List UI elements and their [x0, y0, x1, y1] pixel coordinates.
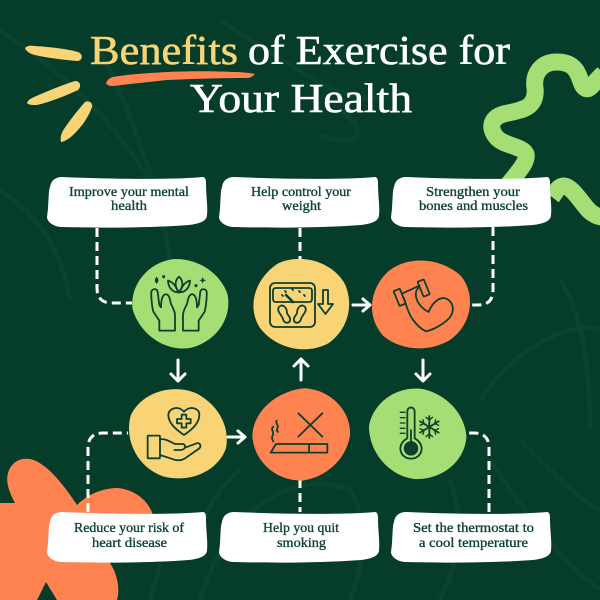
connector: bones and muscles: [470, 227, 493, 305]
box: improve mental health: health: [111, 198, 147, 213]
arrow: bones to thermostat: [416, 360, 430, 381]
arrow: heart disease to quit smoking: [228, 431, 245, 443]
icon: thermometer and snowflake: [400, 407, 439, 459]
circle: heart disease: [109, 373, 245, 495]
box: thermostat: a cool temperature: [419, 535, 528, 550]
decoration: green squiggle: [492, 62, 600, 217]
title: of Exercise for: [248, 27, 510, 73]
icon: flexed arm with dumbbell: [394, 279, 453, 331]
decoration: yellow sunburst dashes: [25, 46, 92, 142]
box: heart disease: heart disease: [92, 535, 167, 550]
connector: quit smoking: [298, 479, 302, 512]
icon: hands with lotus: [151, 276, 207, 331]
box: bones and muscles: [391, 177, 551, 228]
circle: thermostat: [358, 378, 477, 489]
title: [90, 27, 510, 121]
box: quit smoking: Help you quit: [263, 520, 339, 535]
connector: thermostat: [466, 433, 489, 512]
box: heart disease: Reduce your risk of: [74, 520, 185, 535]
box: control weight: Help control your: [251, 184, 352, 199]
box: improve mental health: [47, 177, 207, 228]
circle: quit smoking: [245, 381, 358, 487]
box: thermostat: Set the thermostat to: [413, 520, 534, 535]
box: quit smoking: [219, 512, 379, 563]
connector: heart disease: [88, 433, 128, 512]
circle: mental health: [132, 259, 228, 349]
circle: bones and muscles: [354, 242, 488, 367]
box: quit smoking: smoking: [277, 535, 326, 550]
circle: weight: [238, 247, 365, 362]
arrow: mental health to heart disease: [171, 360, 185, 381]
icon: cigarette with cross: [271, 413, 327, 453]
box: improve mental health: Improve your mental: [69, 184, 189, 199]
decoration: orange flower: [0, 459, 153, 600]
title: Benefits: [90, 27, 238, 73]
icon: hand holding heart: [148, 408, 200, 460]
arrow: weight to bones: [353, 299, 370, 311]
connector: weight: [298, 228, 302, 259]
arrow: quit smoking to weight: [294, 359, 308, 380]
box: control weight: [219, 177, 379, 228]
connector: mental health: [97, 228, 132, 303]
box: heart disease: [47, 512, 207, 563]
title underline: [106, 71, 255, 86]
box: bones and muscles: Strengthen your: [426, 184, 521, 199]
box: thermostat: [391, 512, 551, 563]
title: Your Health: [190, 75, 412, 121]
icon: weighing scale: [270, 283, 333, 327]
box: bones and muscles: bones and muscles: [419, 198, 528, 213]
box: control weight: weight: [282, 198, 321, 213]
